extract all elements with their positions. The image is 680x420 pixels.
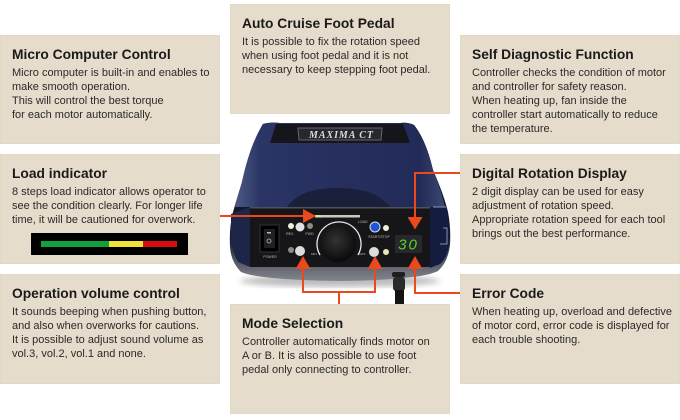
load indicator bar — [31, 233, 188, 255]
panel: load indicator: time, it will be cautioned for overwork. — [12, 214, 195, 226]
A button — [288, 247, 294, 253]
panel: auto cruise foot pedal: It is possible to fix the rotation speed — [242, 36, 420, 48]
power switch — [260, 225, 279, 252]
panel: mode selection: Controller automatically finds motor on — [242, 336, 430, 348]
panel: load indicator: Load indicator — [12, 166, 107, 181]
load strip — [315, 215, 360, 218]
panel: operation volume control: It sounds beeping when pushing button, — [12, 306, 206, 318]
control panel: MIN. — [311, 252, 317, 256]
motor connector — [392, 272, 405, 304]
control panel: LOAD — [358, 220, 368, 224]
panel: micro computer control: Micro computer is built-in and enables to — [12, 67, 209, 79]
panel: operation volume control: and also when overworks for cautions. — [12, 320, 199, 332]
side bulge — [430, 207, 449, 268]
panel: self diagnostic function: When heating up, fan inside the — [472, 95, 627, 107]
arrow: digital rotation display — [408, 173, 460, 230]
panel: operation volume control — [0, 274, 220, 384]
panel: digital rotation display: 2 digit display can be used for easy — [472, 186, 644, 198]
panel: self diagnostic function: controller start automatically to reduce — [472, 109, 658, 121]
panel: error code — [460, 274, 680, 384]
panel: error code: of motor cord, error code is displayed for — [472, 320, 669, 332]
panel: error code: Error Code — [472, 286, 544, 301]
control panel: 30 — [398, 236, 419, 254]
panel: self diagnostic function — [460, 35, 680, 144]
control panel: POWER — [263, 255, 277, 259]
panel: digital rotation display: adjustment of rotation speed. — [472, 200, 614, 212]
start stop button — [370, 222, 380, 232]
arrow: load indicator — [220, 209, 316, 223]
top cover — [270, 124, 410, 143]
panel: load indicator: 8 steps load indicator allows operator to — [12, 186, 206, 198]
panel: micro computer control — [0, 35, 220, 144]
panel: self diagnostic function: and controller for safety reason. — [472, 81, 627, 93]
control panel — [250, 207, 430, 267]
panel: operation volume control: It is possible to adjust sound volume as — [12, 334, 203, 346]
arrow: mode selection — [296, 256, 382, 304]
panel: operation volume control: vol.3, vol.2, vol.1 and none. — [12, 348, 146, 360]
control panel: FWD. — [306, 232, 314, 236]
control panel: REV. — [286, 232, 294, 236]
panel: auto cruise foot pedal: when using foot pedal and it is not — [242, 50, 408, 62]
digital display — [395, 235, 422, 253]
panel: operation volume control: Operation volume control — [12, 286, 180, 301]
panel: load indicator: see the condition clearly. For longer life — [12, 200, 203, 212]
panel: auto cruise foot pedal: necessary to keep stepping foot pedal. — [242, 64, 430, 76]
brand label: MAXIMA CT — [308, 130, 374, 141]
dial — [317, 222, 361, 255]
panel: micro computer control: Micro Computer Control — [12, 47, 171, 62]
panel: load indicator — [0, 154, 220, 264]
REV FWD buttons — [288, 223, 294, 229]
panel: mode selection: pedal only connecting to controller. — [242, 364, 411, 376]
panel: error code: each trouble shooting. — [472, 334, 580, 346]
control panel: START/STOP — [368, 235, 390, 239]
panel: mode selection: Mode Selection — [242, 316, 343, 331]
panel: self diagnostic function: Self Diagnostic Function — [472, 47, 634, 62]
B button — [369, 247, 379, 257]
panel: digital rotation display: Digital Rotation Display — [472, 166, 627, 181]
panel: self diagnostic function: the temperature. — [472, 123, 553, 135]
panel: auto cruise foot pedal — [230, 4, 450, 114]
panel: mode selection: A or B. It is also possible to use foot — [242, 350, 416, 362]
control panel: MAX. — [359, 252, 367, 256]
arrow: error code — [408, 256, 460, 293]
panel: error code: When heating up, overload and defective — [472, 306, 672, 318]
panel: auto cruise foot pedal: Auto Cruise Foot Pedal — [242, 16, 395, 31]
panel: digital rotation display — [460, 154, 680, 264]
device body — [230, 123, 450, 281]
panel: digital rotation display: Appropriate rotation speed for each tool — [472, 214, 665, 226]
panel: micro computer control: This will control the best torque — [12, 95, 164, 107]
panel: micro computer control: make smooth operation. — [12, 81, 130, 93]
dark arc — [287, 188, 390, 207]
panel: mode selection — [230, 304, 450, 414]
panel: micro computer control: for each motor automatically. — [12, 109, 152, 121]
panel: self diagnostic function: Controller checks the condition of motor — [472, 67, 666, 79]
shadow — [240, 275, 440, 287]
panel: digital rotation display: brings out the best performance. — [472, 228, 630, 240]
